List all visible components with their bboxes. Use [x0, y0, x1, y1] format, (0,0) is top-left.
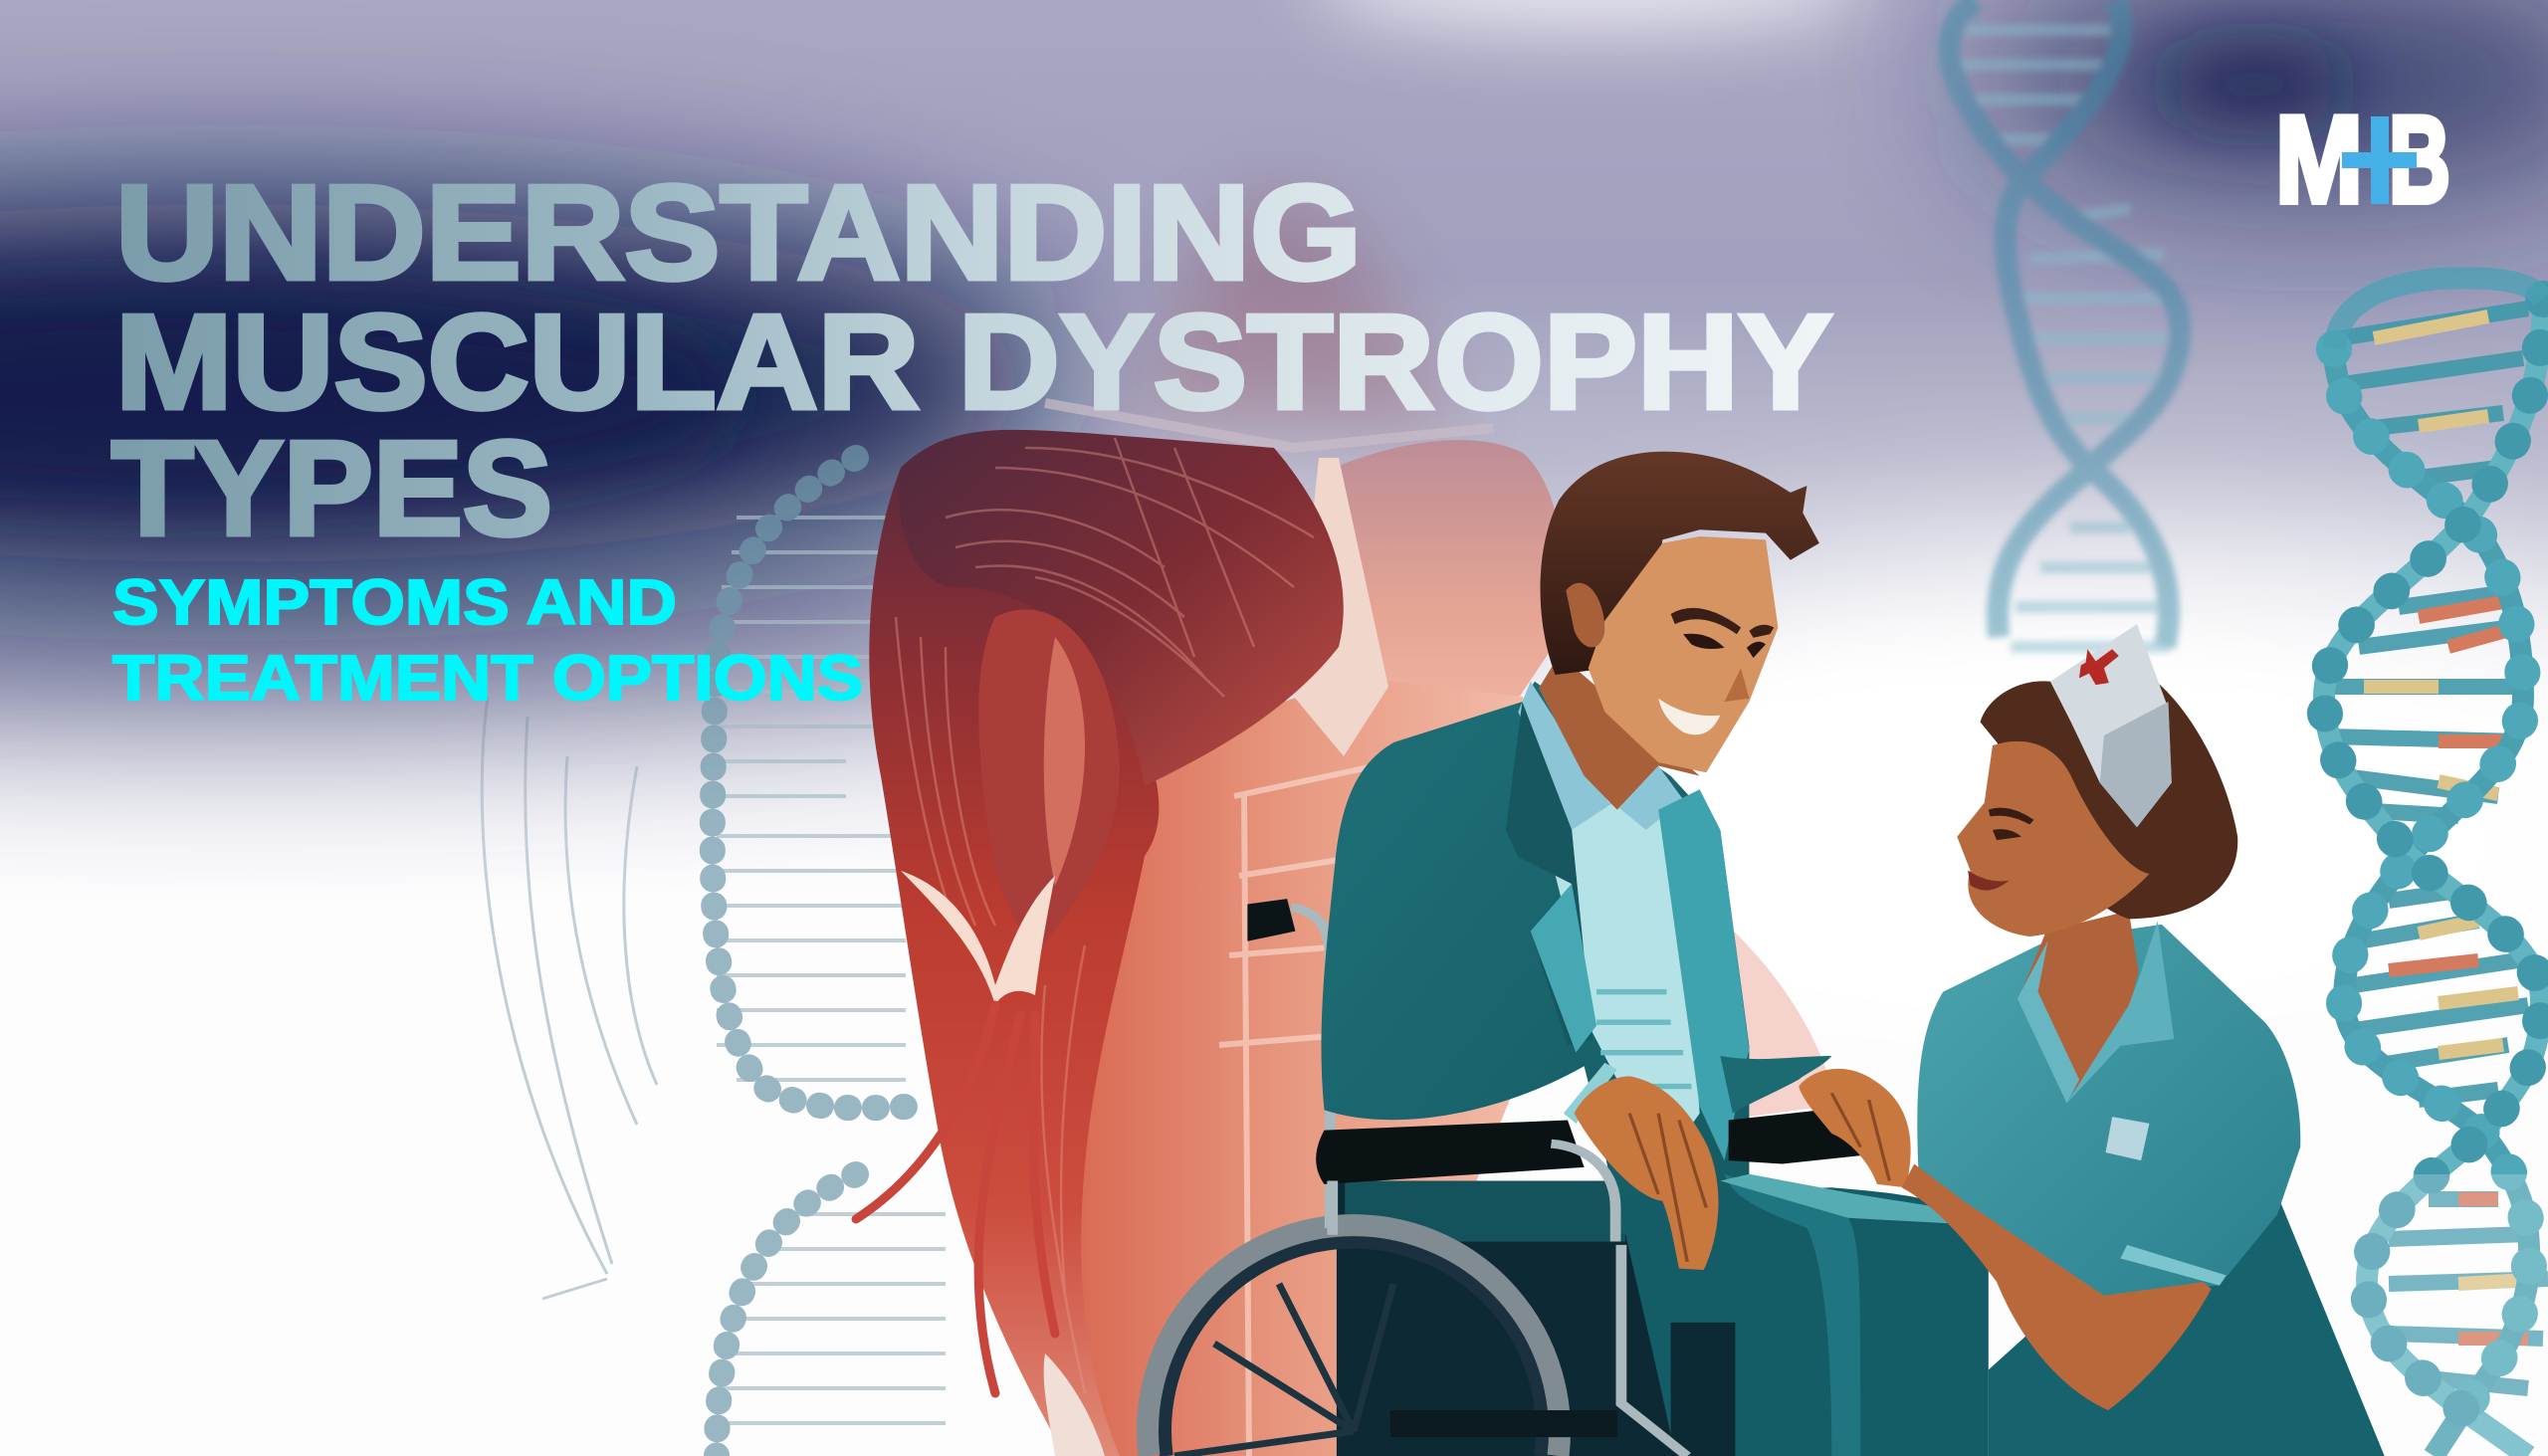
logo B: B: [2389, 92, 2450, 229]
collar left: [2017, 941, 2079, 1104]
hair: [1981, 668, 2237, 919]
tyre gray: [1148, 1225, 1560, 1456]
muscle highlight: [1044, 637, 1085, 886]
title line 1: UNDERSTANDING: [115, 157, 1362, 308]
spokes: [1174, 1284, 1393, 1456]
top lobe: [2334, 278, 2543, 348]
navy soft top right: [1981, 0, 2548, 189]
strand two: [2324, 299, 2543, 1456]
central fascia: [1294, 458, 1388, 756]
sleeve right: [1720, 1056, 1831, 1114]
wheelchair wheel: [1148, 1225, 1560, 1456]
armrest back: [1729, 1106, 1877, 1164]
right fingers: [1831, 1093, 1889, 1180]
white tendons: [901, 871, 1055, 1005]
yellow rung segments: [2364, 316, 2528, 1284]
face: [1589, 536, 1778, 772]
shirt stripes: [1596, 992, 1691, 1087]
seat panel: [1337, 1180, 1675, 1456]
neck: [1539, 655, 1700, 810]
rungs: [1956, 30, 2180, 647]
ghost DNA left: [713, 458, 946, 1456]
push handle: [1247, 899, 1295, 941]
sleeve trim: [2120, 1245, 2227, 1286]
red rung segments: [2389, 602, 2528, 1339]
legs: [1617, 1187, 1989, 1456]
title line 3: TYPES: [111, 413, 552, 563]
logo: [2275, 92, 2450, 229]
navy lower left fade: [0, 498, 1095, 717]
armrest front: [1316, 1120, 1585, 1184]
lower uniform: [1989, 1194, 2385, 1456]
white glow top: [1314, 0, 1871, 30]
subtitle: [112, 566, 863, 714]
right pectoral: [1334, 440, 1563, 736]
uniform top: [1917, 925, 2300, 1296]
forearm strands: [856, 1005, 1055, 1393]
strand one: [2334, 348, 2529, 1456]
thigh highlight: [1725, 1174, 1860, 1456]
jacket: [1321, 682, 1749, 1235]
nurse: [1902, 624, 2385, 1456]
sleeve left cuff: [1564, 1063, 1617, 1124]
footrest block: [1671, 1323, 1735, 1456]
badge: [2106, 1117, 2149, 1160]
eyes: [1683, 634, 1766, 658]
hair: [1541, 452, 1819, 675]
ghost strands: [713, 458, 906, 1456]
neck haze: [1135, 199, 1463, 428]
ghost rungs: [717, 518, 946, 1423]
arm: [869, 468, 1159, 1456]
abdomen: [1055, 677, 1553, 1456]
thigh highlight top: [1720, 1174, 1972, 1225]
wheelchair seat: [1337, 1180, 1675, 1456]
ghost anatomy outline: [482, 75, 926, 1299]
forearm: [1902, 1164, 2212, 1410]
abdominal lines: [1219, 766, 1374, 1456]
smile: [1658, 699, 1720, 734]
logo M: M: [2275, 92, 2363, 229]
eyebrows: [1671, 608, 1774, 638]
push handle frame: [1291, 908, 1330, 1228]
teal rungs: [2329, 309, 2548, 1388]
subtitle line 2: TREATMENT OPTIONS: [112, 642, 863, 714]
hand right: [1799, 1069, 1911, 1187]
title: [111, 157, 1832, 563]
right torso shade: [1692, 896, 1836, 1125]
white glow lower right: [1503, 547, 2548, 965]
lilac veil: [0, 0, 2548, 926]
nurse cap: [2050, 624, 2172, 827]
hand left: [1575, 1076, 1719, 1270]
navy band core: [0, 294, 737, 503]
navy core top right: [2155, 57, 2354, 112]
shirt: [1531, 682, 1700, 1160]
forearm tendon end: [1044, 1353, 1105, 1456]
tyre dark: [1165, 1242, 1543, 1456]
title line 2: MUSCULAR DYSTROPHY: [115, 287, 1832, 437]
jacket right panel: [1658, 789, 1749, 1160]
DNA lower fade: [2319, 1174, 2548, 1456]
DNA right: [2324, 278, 2548, 1456]
left fingers: [1629, 1114, 1706, 1262]
mouth: [1968, 871, 2010, 891]
white glow lower right core: [1383, 657, 2498, 1015]
bead overlay two: [2324, 299, 2543, 1410]
ear: [1566, 583, 1604, 647]
chair frame: [1333, 1144, 1687, 1456]
blurred DNA centre: [1950, 0, 2180, 647]
subtitle line 1: SYMPTOMS AND: [112, 566, 677, 638]
face: [1957, 741, 2149, 936]
deltoid: [899, 430, 1344, 786]
neck: [2021, 911, 2139, 1100]
jacket tail: [1345, 1180, 1625, 1242]
shirt collar: [1518, 682, 1683, 830]
eye and brow: [1989, 808, 2033, 840]
foot bar: [1390, 1410, 1617, 1437]
lapel left: [1506, 702, 1592, 1046]
nose shadow: [1725, 668, 1749, 702]
biceps: [978, 609, 1120, 955]
navy band left: [0, 204, 1055, 562]
bead overlay one: [2334, 348, 2529, 1410]
red cross: [2079, 649, 2119, 685]
collar bands: [1045, 403, 1493, 448]
man in wheelchair: [1247, 452, 1989, 1456]
collar right: [2067, 921, 2174, 1104]
muscular anatomy: [856, 199, 1836, 1456]
cap shade: [2100, 702, 2172, 827]
navy haze overlay: [0, 0, 2548, 1015]
lapel light: [1531, 884, 1596, 1053]
strands: [1950, 0, 2180, 637]
muscle fibres: [896, 438, 1314, 1393]
logo plus: [2342, 116, 2417, 204]
